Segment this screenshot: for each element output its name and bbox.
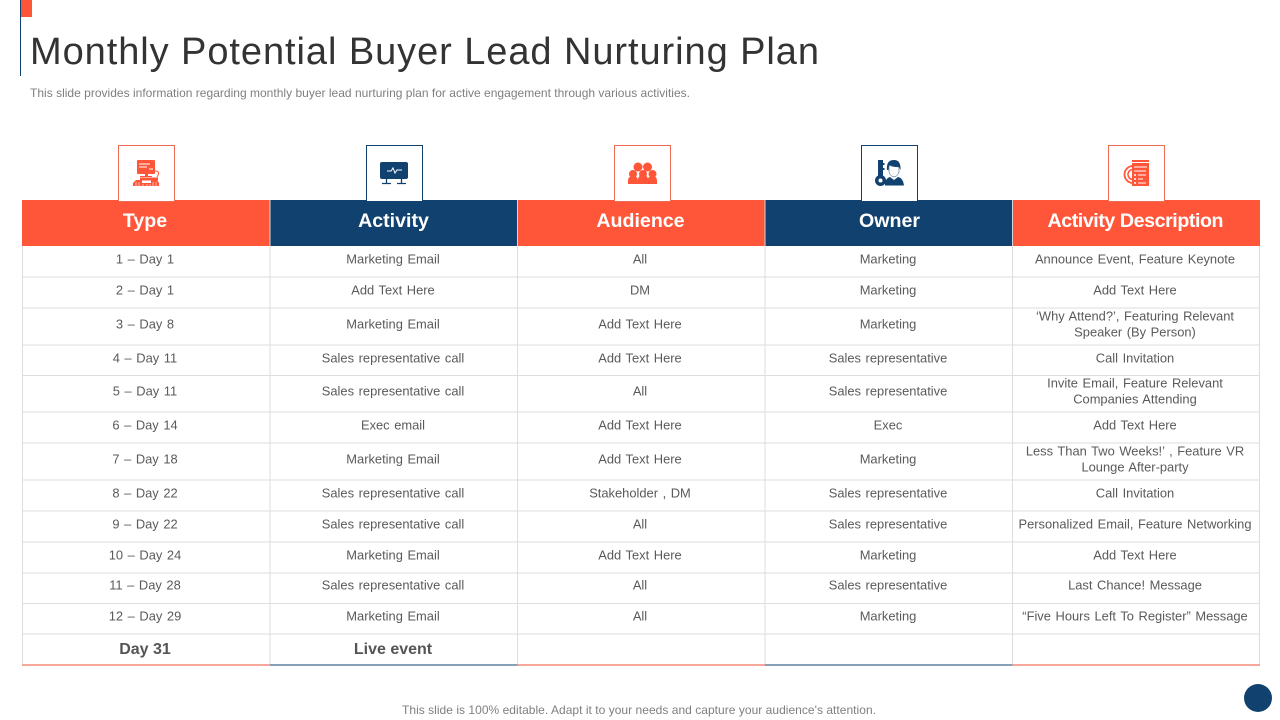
row 5: Sales representative call <box>322 384 464 398</box>
row 8: 8 – Day 22 <box>112 486 178 500</box>
row 5: Companies Attending <box>1073 392 1197 406</box>
icon: activity checklist <box>1108 146 1164 202</box>
row 11 <box>109 578 1202 592</box>
row 2: DM <box>630 282 650 298</box>
table bottom border <box>22 664 1260 666</box>
row 4: Sales representative <box>829 350 947 366</box>
row 10: Marketing <box>860 548 916 562</box>
row 1: Announce Event, Feature Keynote <box>1035 252 1235 266</box>
row 10: Marketing Email <box>346 548 440 562</box>
row 3: 3 – Day 8 <box>116 316 174 332</box>
row 10: Add Text Here <box>598 548 682 562</box>
row 1 <box>116 252 1235 266</box>
row 4 <box>113 350 1174 366</box>
row 2 <box>116 282 1177 298</box>
row 3 <box>116 308 1234 340</box>
row 2: 2 – Day 1 <box>116 282 174 298</box>
icon: monitor with pulse <box>366 146 422 202</box>
final row: live event: Live event <box>354 641 433 658</box>
row 12: Marketing Email <box>346 608 440 624</box>
row 9: Personalized Email, Feature Networking <box>1018 516 1252 532</box>
row 9: 9 – Day 22 <box>112 516 178 532</box>
row 7: Marketing Email <box>346 452 440 466</box>
row 2: Marketing <box>860 282 916 298</box>
row 11: All <box>633 578 647 592</box>
final row: live event <box>119 641 433 658</box>
table header row: Type <box>123 210 167 232</box>
table: lead nurturing plan <box>22 200 1260 666</box>
row 9: All <box>633 516 647 532</box>
row 9 <box>112 516 1252 532</box>
row 7: 7 – Day 18 <box>112 452 178 466</box>
row 5: Sales representative <box>829 384 947 398</box>
icon: computer and keyboard <box>118 146 174 202</box>
row 3: ‘Why Attend?’, Featuring Relevant <box>1036 308 1234 324</box>
table header row <box>22 200 1260 246</box>
row 6: Add Text Here <box>1093 418 1177 432</box>
table header row: Activity <box>358 210 429 232</box>
row 8 <box>112 486 1174 500</box>
row 2: Add Text Here <box>351 282 435 298</box>
row 3: Marketing <box>860 316 916 332</box>
row 2: Add Text Here <box>1093 282 1177 298</box>
row 6: 6 – Day 14 <box>112 418 178 432</box>
row 5: 5 – Day 11 <box>113 384 177 398</box>
row 12: 12 – Day 29 <box>109 608 181 624</box>
table header row: Audience <box>596 210 685 232</box>
row 10: 10 – Day 24 <box>109 548 181 562</box>
row 11: Sales representative <box>829 578 947 592</box>
row 4: Sales representative call <box>322 350 464 366</box>
row 7: Lounge After-party <box>1081 460 1189 474</box>
row 4: 4 – Day 11 <box>113 350 177 366</box>
row 11: 11 – Day 28 <box>109 578 181 592</box>
row 5: Invite Email, Feature Relevant <box>1047 376 1223 390</box>
row 5 <box>113 376 1223 406</box>
row 12: All <box>633 608 647 624</box>
row 6 <box>112 418 1177 432</box>
row 12: “Five Hours Left To Register” Message <box>1022 608 1248 624</box>
row 8: Sales representative <box>829 486 947 500</box>
accent: corner block and vertical rule <box>20 0 32 76</box>
row 4: Add Text Here <box>598 350 682 366</box>
row 5: All <box>633 384 647 398</box>
row 11: Sales representative call <box>322 578 464 592</box>
row 11: Last Chance! Message <box>1068 578 1202 592</box>
row 10: Add Text Here <box>1093 548 1177 562</box>
row 6: Exec email <box>361 418 425 432</box>
final row: live event: Day 31 <box>119 641 171 658</box>
page badge <box>1244 684 1272 712</box>
row 9: Sales representative <box>829 516 947 532</box>
row 1: Marketing <box>860 252 916 266</box>
row 1: All <box>633 252 647 266</box>
row 3: Add Text Here <box>598 316 682 332</box>
row 3: Speaker (By Person) <box>1074 324 1196 340</box>
footer note: This slide is 100% editable. Adapt it to your needs and capture your audience's attention. <box>402 703 876 717</box>
row 7: Less Than Two Weeks!’ , Feature VR <box>1026 444 1244 458</box>
icon: audience group <box>614 146 670 202</box>
row 1: Marketing Email <box>346 252 440 266</box>
row 8: Sales representative call <box>322 486 464 500</box>
row 7: Add Text Here <box>598 452 682 466</box>
row 12 <box>109 608 1248 624</box>
icon: owner with key <box>862 146 918 202</box>
row 3: Marketing Email <box>346 316 440 332</box>
row 4: Call Invitation <box>1096 350 1174 366</box>
title: Monthly Potential Buyer Lead Nurturing Plan <box>30 31 819 73</box>
row 8: Stakeholder , DM <box>589 486 691 500</box>
row 6: Exec <box>874 418 903 432</box>
row 9: Sales representative call <box>322 516 464 532</box>
row 6: Add Text Here <box>598 418 682 432</box>
row 10 <box>109 548 1177 562</box>
row 7: Marketing <box>860 452 916 466</box>
row 8: Call Invitation <box>1096 486 1174 500</box>
subtitle: This slide provides information regarding monthly buyer lead nurturing plan for active engagement through various activities. <box>30 86 690 100</box>
table header row: Owner <box>859 210 920 232</box>
table header row: Activity Description <box>1048 210 1224 232</box>
row 1: 1 – Day 1 <box>116 252 174 266</box>
row 7 <box>112 444 1244 474</box>
row 12: Marketing <box>860 608 916 624</box>
